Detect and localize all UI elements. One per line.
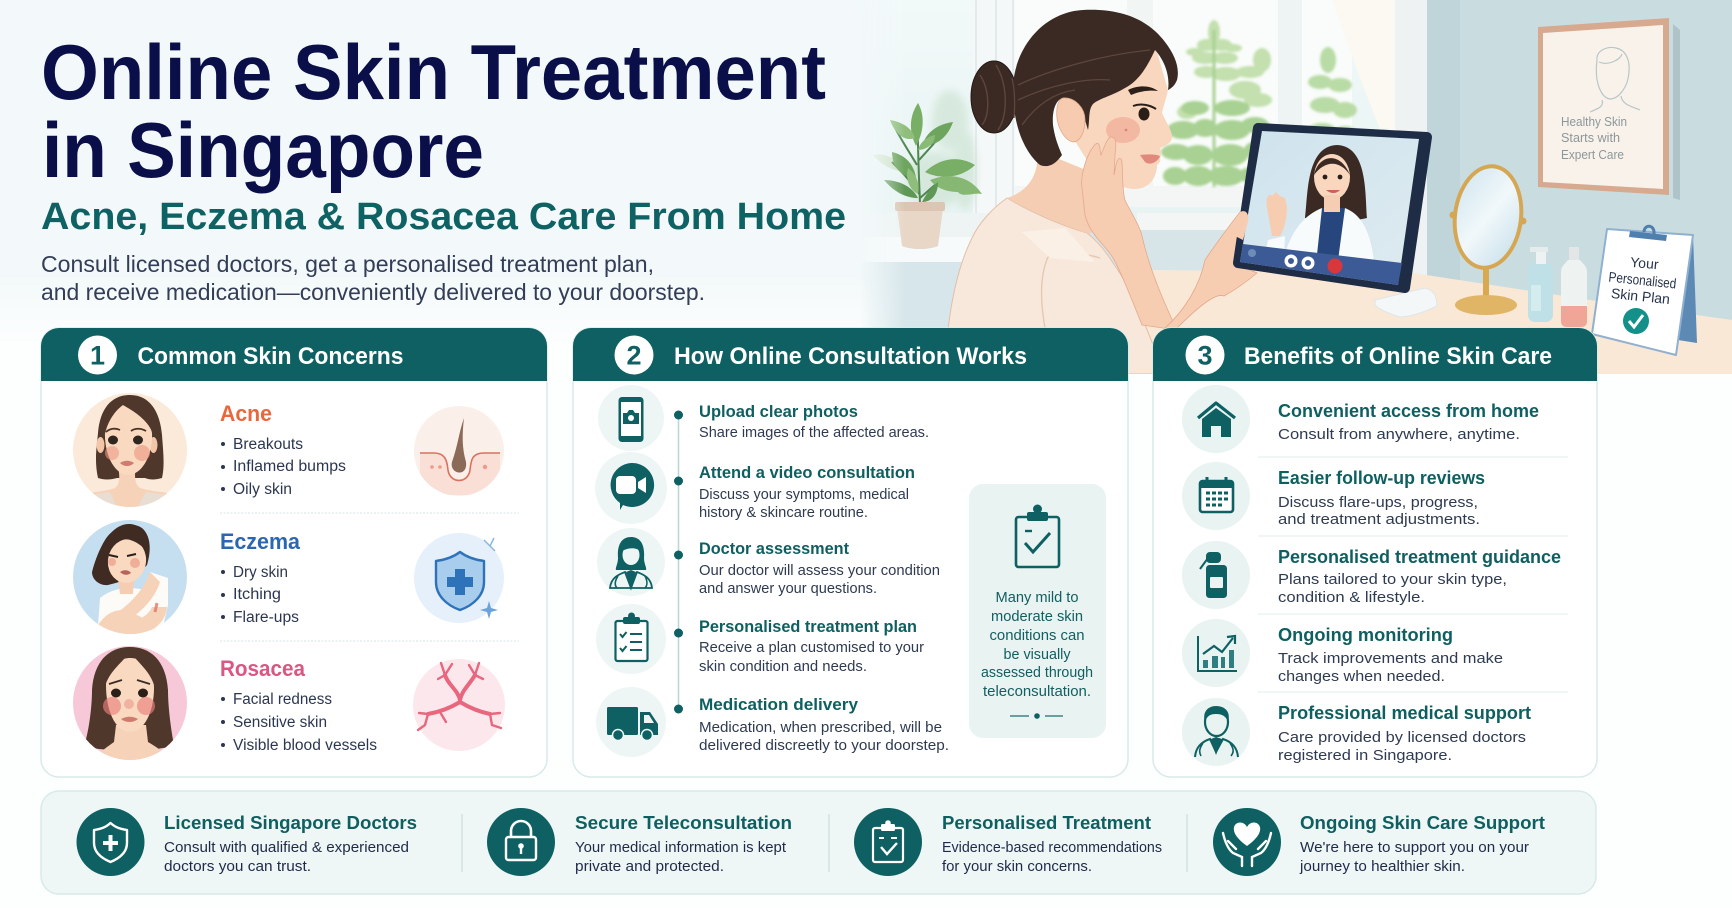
benefit: ongoing monitoring: changes when needed. [1278, 668, 1445, 685]
eczema text: Eczema [220, 529, 301, 554]
trust: ongoing support [1299, 812, 1545, 875]
acne text: Acne [220, 401, 272, 426]
step: medication delivery: Medication delivery [699, 695, 859, 714]
desk [1146, 270, 1732, 374]
trust: secure teleconsultation: Your medical information is kept [575, 839, 787, 856]
icon: phone camera [598, 385, 664, 451]
tablet with doctor on video call [1165, 128, 1427, 330]
ear [1057, 98, 1085, 142]
benefit: follow-up reviews: and treatment adjustments. [1278, 511, 1480, 528]
step: upload clear photos: Share images of the affected areas. [699, 425, 929, 441]
eczema text [220, 529, 301, 626]
step: medication delivery: Medication, when prescribed, will be [699, 720, 942, 736]
benefit: convenient access [1278, 401, 1539, 443]
step: personalised treatment plan: skin condition and needs. [699, 659, 867, 675]
step: attend a video consultation: Discuss your symptoms, medical [699, 487, 909, 503]
step: doctor assessment: and answer your questions. [699, 581, 877, 597]
icon: female doctor [597, 528, 665, 596]
potted plant [873, 103, 982, 249]
step: attend a video consultation: Attend a video consultation [699, 463, 915, 482]
page background [0, 0, 1732, 345]
panel 2: how online consultation works [573, 328, 1128, 777]
icon: rising chart [1182, 619, 1250, 687]
trust: secure teleconsultation: Secure Teleconsultation [575, 812, 792, 833]
icon: shield [76, 808, 144, 876]
benefit: follow-up reviews [1278, 468, 1485, 528]
portrait: eczema [73, 520, 187, 634]
trust: licensed doctors: Licensed Singapore Doctors [164, 812, 417, 833]
title: in Singapore [42, 106, 484, 194]
icon: padlock [487, 808, 555, 876]
trust: ongoing support: Ongoing Skin Care Support [1300, 812, 1545, 833]
callout: teleconsultation note [969, 484, 1106, 738]
poster text [1561, 114, 1627, 162]
panel 3 header [1153, 328, 1597, 381]
acne text: Oily skin [233, 481, 292, 498]
panel 2 header: 2 [626, 340, 642, 370]
benefit: treatment guidance [1278, 547, 1561, 606]
icon: delivery truck [596, 687, 666, 757]
hand on cheek and forearm [1082, 137, 1177, 330]
step: upload clear photos: Upload clear photos [699, 402, 858, 421]
acne text [220, 401, 346, 498]
blurred greenery, left pane [905, 90, 977, 210]
step: attend a video consultation: history & skincare routine. [699, 505, 868, 521]
clipboard sign: your personalised skin plan: Skin Plan [1610, 285, 1671, 307]
panel 3 header: Benefits of Online Skin Care [1244, 343, 1552, 370]
trust: licensed doctors: doctors you can trust. [164, 858, 311, 875]
callout text: Many mild to [996, 590, 1078, 606]
acne text: Inflamed bumps [233, 458, 346, 475]
callout text: assessed through [981, 665, 1093, 681]
icon: male doctor [1182, 698, 1250, 766]
poster text: Starts with [1561, 130, 1620, 145]
step: personalised treatment plan: Personalised treatment plan [699, 617, 917, 636]
benefit: ongoing monitoring [1278, 625, 1503, 685]
bun [971, 61, 1017, 133]
benefit: treatment guidance: condition & lifestyle. [1278, 589, 1425, 606]
benefit: ongoing monitoring: Ongoing monitoring [1278, 625, 1453, 645]
callout text: teleconsultation. [983, 684, 1091, 700]
intro text: Consult licensed doctors, get a personalised treatment plan, [41, 251, 654, 277]
callout text: be visually [1004, 647, 1071, 663]
title: Online Skin Treatment [41, 28, 826, 116]
panel 3 header: 3 [1197, 340, 1213, 370]
eczema text: Dry skin [233, 564, 288, 581]
callout text: conditions can [990, 628, 1084, 644]
step: doctor assessment: Doctor assessment [699, 539, 849, 558]
step: upload clear photos [699, 402, 929, 441]
subtitle: Acne, Eczema & Rosacea Care From Home [41, 196, 846, 238]
step: doctor assessment: Our doctor will assess your condition [699, 563, 940, 579]
trust: secure teleconsultation [575, 812, 792, 875]
hair [1013, 10, 1178, 166]
acne text: Breakouts [233, 436, 303, 453]
rosacea text [220, 656, 377, 754]
clipboard sign: your personalised skin plan: Your [1630, 254, 1660, 272]
icon: heart in hands [1213, 808, 1281, 876]
poster text: Expert Care [1561, 147, 1624, 162]
trust: personalised treatment: for your skin concerns. [942, 858, 1092, 875]
callout text [981, 590, 1093, 700]
benefit: treatment guidance: Plans tailored to your skin type, [1278, 571, 1507, 588]
skincare bottles [1528, 247, 1587, 327]
step: medication delivery: delivered discreetly to your doorstep. [699, 738, 949, 754]
step: personalised treatment plan: Receive a plan customised to your [699, 640, 924, 656]
panel 3: benefits of online skin care [1153, 328, 1597, 777]
timeline [674, 410, 683, 714]
clipboard sign: your personalised skin plan: Personalised [1608, 269, 1677, 292]
trust: personalised treatment: Evidence-based recommendations [942, 839, 1162, 856]
step: attend a video consultation [699, 463, 915, 521]
icon: clipboard [854, 808, 922, 876]
trust: licensed doctors: Consult with qualified & experienced [164, 839, 409, 856]
benefit: professional support: registered in Singapore. [1278, 747, 1452, 764]
benefit: professional support [1278, 703, 1531, 764]
trust: licensed doctors [164, 812, 417, 875]
step: doctor assessment [699, 539, 940, 597]
poster text: Healthy Skin [1561, 114, 1627, 129]
icon: calendar [1182, 462, 1250, 530]
rosacea text: Rosacea [220, 656, 306, 681]
icon: medicine bottle [1182, 541, 1250, 609]
icon: blood vessels [413, 659, 505, 751]
flower pot [895, 202, 945, 249]
panel 1 header [41, 328, 547, 381]
benefit: professional support: Care provided by licensed doctors [1278, 729, 1526, 746]
hero illustration: woman on video consultation at desk [860, 0, 1732, 374]
rosacea text: Facial redness [233, 691, 332, 708]
intro text: and receive medication—conveniently delivered to your doorstep. [41, 279, 705, 305]
trust: personalised treatment: Personalised Treatment [942, 812, 1151, 833]
trust: personalised treatment [942, 812, 1162, 875]
panel 2 header [573, 328, 1128, 381]
clipboard sign: your personalised skin plan [1592, 226, 1697, 355]
doctor in tablet [1266, 145, 1374, 260]
benefit: follow-up reviews: Easier follow-up reviews [1278, 468, 1485, 488]
portrait: acne [70, 390, 190, 510]
icon: checklist [596, 604, 666, 674]
icon: house [1182, 385, 1250, 453]
benefit: professional support: Professional medical support [1278, 703, 1531, 723]
trust: ongoing support: journey to healthier skin. [1299, 858, 1465, 875]
panel 1 header: Common Skin Concerns [138, 343, 404, 370]
step: medication delivery [699, 695, 949, 754]
benefit: convenient access: Consult from anywhere, anytime. [1278, 426, 1520, 443]
callout text: moderate skin [991, 609, 1083, 625]
benefit: convenient access: Convenient access from home [1278, 401, 1539, 421]
window and room background [860, 0, 1732, 330]
panel 2 header: How Online Consultation Works [674, 343, 1027, 370]
intro text [41, 251, 705, 305]
benefit: follow-up reviews: Discuss flare-ups, progress, [1278, 494, 1478, 511]
icon: shield with cross [414, 533, 504, 623]
woman's top [946, 198, 1165, 374]
white device base under tablet [1375, 288, 1437, 317]
trust: secure teleconsultation: private and protected. [575, 858, 724, 875]
benefit: treatment guidance: Personalised treatment guidance [1278, 547, 1561, 567]
trust: ongoing support: We're here to support you on your [1300, 839, 1529, 856]
icon: video call [595, 452, 667, 524]
icon: clipboard check [1016, 504, 1059, 567]
rosacea text: Sensitive skin [233, 714, 327, 731]
icon: hair follicle [414, 406, 504, 496]
panel 1 header: 1 [90, 340, 105, 370]
facial features [1125, 86, 1160, 164]
title [41, 28, 826, 194]
neck [1008, 159, 1124, 234]
framed poster: healthy skin [1538, 18, 1680, 200]
panel 1: common skin concerns [41, 328, 547, 777]
trust strip [41, 791, 1596, 894]
face [1076, 50, 1172, 189]
greenery outside window [1161, 20, 1358, 187]
eczema text: Flare-ups [233, 609, 299, 626]
portrait: rosacea [73, 646, 187, 760]
eczema text: Itching [233, 586, 281, 603]
mirror on stand [1447, 160, 1529, 315]
step: personalised treatment plan [699, 617, 924, 675]
benefit: ongoing monitoring: Track improvements and make [1278, 650, 1503, 667]
rosacea text: Visible blood vessels [233, 737, 377, 754]
